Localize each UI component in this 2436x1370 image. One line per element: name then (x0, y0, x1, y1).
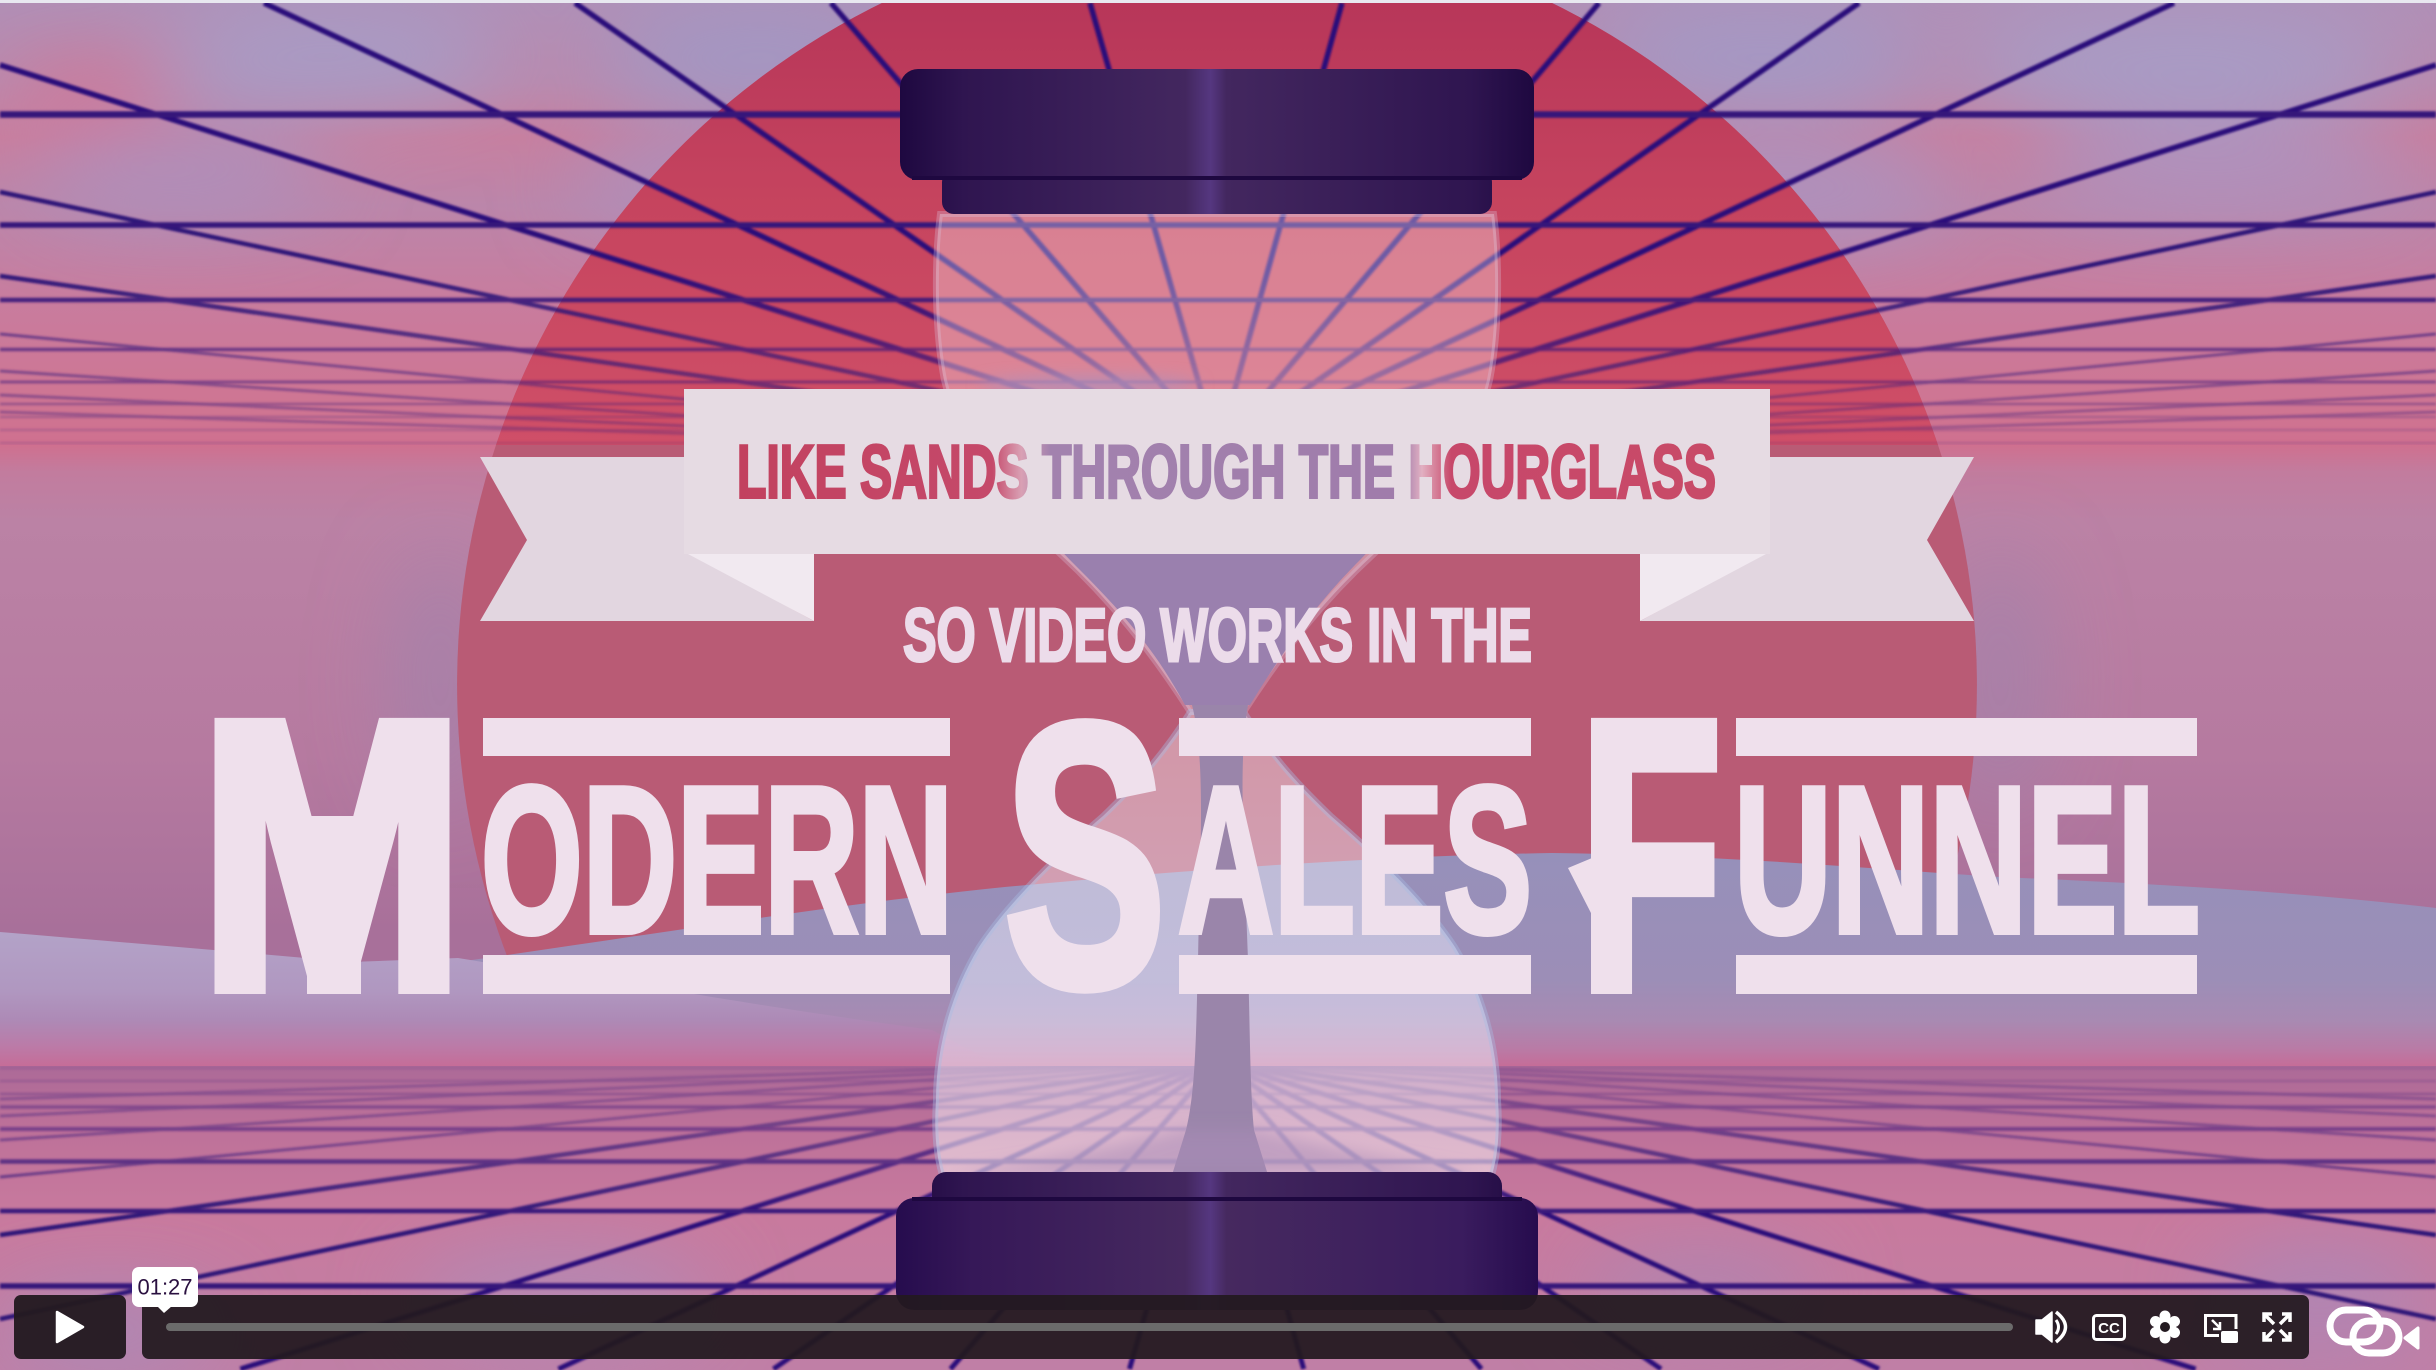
player controls (14, 1267, 2309, 1359)
word: Sales: ALES (1178, 744, 1532, 977)
right tail fold (1640, 554, 1766, 621)
word: Sales (1003, 645, 1532, 1067)
bottom cap (896, 1172, 1538, 1310)
ribbon main panel (684, 389, 1770, 554)
control bar (142, 1295, 2309, 1359)
red sun disc (457, 0, 1977, 1000)
icon: settings gear (2150, 1310, 2180, 1344)
word: Funnel: F (1579, 641, 1722, 1070)
main title (198, 641, 2200, 1070)
sand dunes (0, 853, 2436, 1066)
lower sand pile (950, 1130, 1484, 1175)
upper glass bulb (936, 214, 1498, 712)
play button (14, 1295, 126, 1359)
perspective floor (0, 1066, 2436, 1370)
sky grid lines (0, 3, 2436, 450)
floor grid lines (0, 1061, 2436, 1369)
icon: picture in picture (2206, 1316, 2238, 1343)
upper sand (980, 377, 1430, 705)
lower glass bulb (935, 712, 1499, 1175)
word: Modern: M (198, 641, 466, 1070)
left ribbon tail (480, 457, 814, 621)
time tooltip (132, 1267, 198, 1313)
word: Modern (198, 641, 953, 1070)
icon: fullscreen (2264, 1314, 2290, 1340)
floor colour patches (0, 1245, 2430, 1365)
progress track (166, 1323, 2013, 1331)
word: Funnel (1568, 641, 2200, 1070)
top cap (900, 69, 1534, 214)
top edge strip (0, 0, 2436, 3)
icon: volume (2036, 1312, 2066, 1342)
word: Funnel: UNNEL (1734, 744, 2200, 977)
ribbon text: LIKE SANDS THROUGH THE HOURGLASS (737, 430, 1716, 514)
icon: closed captions (2094, 1316, 2124, 1340)
hourglass (896, 69, 1538, 1310)
ribbon banner (480, 389, 1974, 621)
word: Sales: S (1003, 645, 1167, 1067)
time tooltip: 01:27 (137, 1274, 193, 1300)
icon: closed captions: CC (2098, 1320, 2120, 1337)
background sky and horizon (0, 3, 2436, 962)
subtitle: SO VIDEO WORKS IN THE (903, 593, 1532, 677)
falling sand stream (1172, 705, 1268, 1175)
logo: linked rings camera (2330, 1310, 2418, 1353)
right ribbon tail (1640, 457, 1974, 621)
left tail fold (688, 554, 814, 621)
word: Modern: ODERN (481, 744, 953, 977)
